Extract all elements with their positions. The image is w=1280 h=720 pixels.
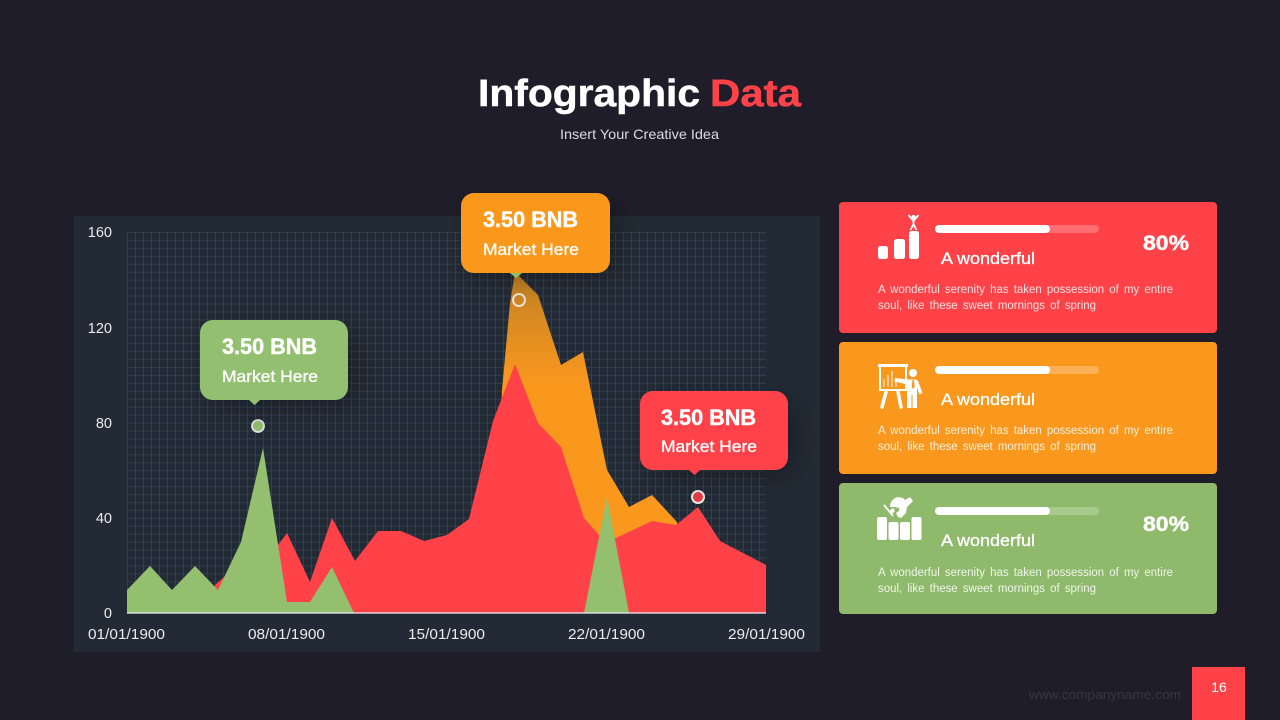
x axis labels: 22/01/1900 [568, 627, 645, 643]
page number: 16 [1211, 679, 1227, 695]
panel: area chart [74, 216, 820, 652]
page number [1192, 667, 1245, 720]
heading: A wonderful [941, 249, 1035, 268]
callout: orange: Market Here [483, 241, 579, 259]
y axis labels [88, 225, 112, 622]
series: orange area [492, 272, 690, 613]
body text: soul, like these sweet mornings of spring [878, 583, 1096, 595]
panel: red card [839, 202, 1217, 333]
subtitle: Insert Your Creative Idea [560, 126, 719, 142]
marker: red point [692, 491, 704, 503]
callout: red [640, 391, 788, 475]
progress bar [935, 507, 1099, 515]
body text: A wonderful serenity has taken possession of my entire [878, 425, 1173, 437]
footer url: www.companyname.com [1028, 687, 1181, 702]
y axis labels: 40 [96, 511, 112, 527]
panel: orange card [839, 342, 1217, 474]
title: Data [710, 73, 802, 115]
heading: A wonderful [941, 531, 1035, 550]
series: red area [205, 364, 766, 613]
marker: orange point [513, 294, 525, 306]
series: green area left [127, 448, 354, 613]
body text: A wonderful serenity has taken possession of my entire [878, 284, 1173, 296]
x axis labels: 01/01/1900 [88, 627, 165, 643]
icon: presenter at board [878, 364, 922, 408]
body text: soul, like these sweet mornings of spring [878, 300, 1096, 312]
body text [878, 567, 1173, 595]
icon: handshake over bars [877, 497, 922, 540]
y axis labels: 120 [88, 321, 112, 337]
percent: 80% [1143, 232, 1189, 255]
progress bar [935, 225, 1099, 233]
callout: red: 3.50 BNB [661, 405, 756, 430]
heading: A wonderful [941, 390, 1035, 409]
x axis labels [88, 627, 805, 643]
x axis labels: 08/01/1900 [248, 627, 325, 643]
y axis labels: 160 [88, 225, 112, 241]
x axis labels: 15/01/1900 [408, 627, 485, 643]
body text: soul, like these sweet mornings of spring [878, 441, 1096, 453]
callout: red: Market Here [661, 438, 757, 456]
x axis labels: 29/01/1900 [728, 627, 805, 643]
y axis labels: 80 [96, 416, 112, 432]
icon: person on bar chart [878, 215, 919, 259]
callout: orange: 3.50 BNB [483, 207, 578, 232]
title: Infographic [478, 73, 700, 115]
y axis labels: 0 [104, 606, 112, 622]
marker: green point [252, 420, 264, 432]
title [478, 73, 802, 115]
series: green area spike [584, 497, 629, 613]
body text [878, 284, 1173, 312]
progress bar [935, 366, 1099, 374]
callout: orange [461, 193, 610, 278]
x axis line [127, 612, 766, 614]
body text: A wonderful serenity has taken possession of my entire [878, 567, 1173, 579]
panel: green card [839, 483, 1217, 614]
percent: 80% [1143, 513, 1189, 536]
callout: green: Market Here [222, 368, 318, 386]
body text [878, 425, 1173, 453]
callout: green: 3.50 BNB [222, 334, 317, 359]
callout: green [200, 320, 348, 405]
